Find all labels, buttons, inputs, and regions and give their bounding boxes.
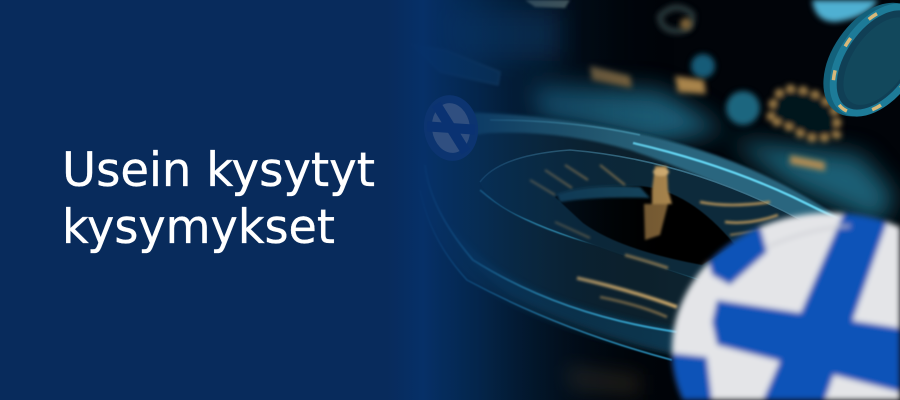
blurred teal haze behind wheel [440,10,895,225]
dark scene background [380,0,900,400]
small flag chip behind wheel [420,92,482,164]
faint lower reflections [565,365,640,395]
title [62,143,375,255]
lower glass band [450,225,680,355]
blurred background chips and bokeh [412,0,878,171]
outer wheel body [420,113,850,360]
wheel spindle [644,166,672,240]
chip: upper right [808,0,900,132]
outer sweep lines [420,120,840,360]
title: kysymykset [62,200,335,255]
glass rim band [440,113,840,225]
wheel centre bowl [555,186,735,265]
title: Usein kysytyt [62,143,375,198]
gold wheel reflections [530,165,778,317]
roulette wheel [420,113,850,395]
numbered ring [480,150,805,280]
large Finnish flag chip [660,205,900,400]
